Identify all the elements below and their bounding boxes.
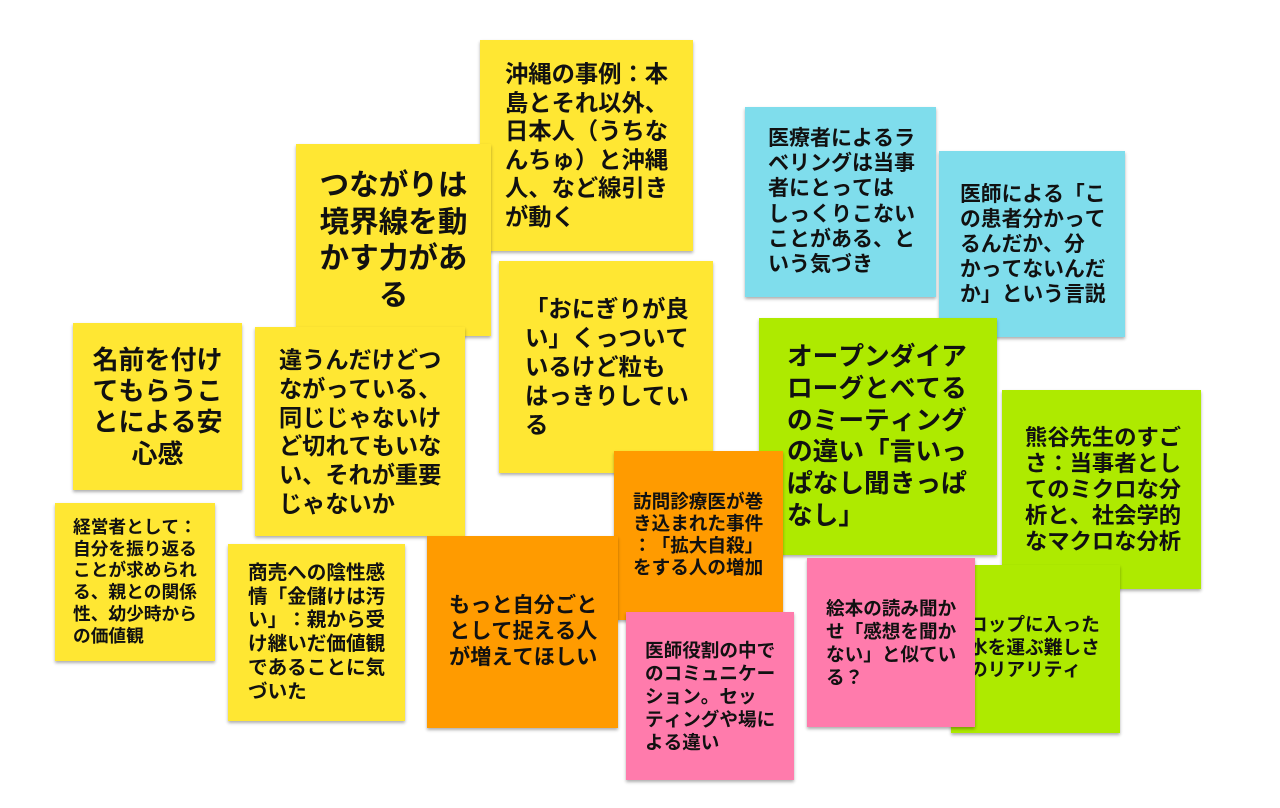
note: communication in doctor role: 医師役割の中で xyxy=(645,640,775,661)
note: as a manager: 性、幼少時から xyxy=(73,604,197,624)
note: Okinawa case: 日本人（うちな xyxy=(505,118,668,144)
note: relief of being named: 心感 xyxy=(131,439,184,469)
note: as a manager: ことが求められ xyxy=(73,560,197,580)
note: doctor discourse: るんだか、分 xyxy=(960,233,1085,256)
note: home-visit doctor incident: 訪問診療医が巻 xyxy=(633,491,763,512)
note: Okinawa case: が動く xyxy=(505,204,575,230)
note: home-visit doctor incident xyxy=(614,451,783,620)
note: Dr. Kumagaya: 析と、社会学的 xyxy=(1025,503,1181,528)
note: relief of being named: てもらうこ xyxy=(92,376,222,406)
note: as a manager: 経営者として： xyxy=(73,517,197,537)
note: as a manager: の価値観 xyxy=(73,626,144,646)
note: open dialogue vs Bethel meeting: ぱなし聞きっぱ xyxy=(787,470,967,498)
note: labeling by medical staff: いう気づき xyxy=(768,253,873,276)
note: more personal ownership: が増えてほしい xyxy=(449,646,597,669)
note: onigiri: はっきりしてい xyxy=(525,383,689,409)
note: more personal ownership xyxy=(427,536,618,728)
note: negative feelings about business: け継いだ価値観 xyxy=(248,633,385,655)
note: Okinawa case: 沖縄の事例：本 xyxy=(505,61,668,87)
note: negative feelings about business: づいた xyxy=(248,681,307,703)
note: communication in doctor role: よる違い xyxy=(645,732,719,753)
note: relief of being named: とによる安 xyxy=(92,407,222,437)
note: carrying a cup of water: のリアリティ xyxy=(969,659,1081,680)
note: home-visit doctor incident: をする人の増加 xyxy=(633,557,763,578)
note: as a manager xyxy=(55,503,215,661)
note: as a manager: る、親との関係 xyxy=(73,582,197,602)
note: labeling by medical staff: 者にとっては xyxy=(768,177,894,200)
note: onigiri: 「おにぎりが良 xyxy=(525,296,689,322)
note: doctor discourse: の患者分かって xyxy=(960,208,1106,231)
note: onigiri: る xyxy=(525,412,548,438)
note: Dr. Kumagaya xyxy=(1002,390,1201,589)
note: Dr. Kumagaya: なマクロな分析 xyxy=(1025,529,1181,554)
note: open dialogue vs Bethel meeting: なし」 xyxy=(787,502,864,530)
note: carrying a cup of water xyxy=(951,565,1120,733)
note: labeling by medical staff xyxy=(745,107,936,297)
note: as a manager: 自分を振り返る xyxy=(73,539,197,559)
note: carrying a cup of water: コップに入った xyxy=(969,614,1100,635)
note: connections move boundaries: つながりは xyxy=(320,169,467,202)
note: connections move boundaries: る xyxy=(379,278,408,312)
note: labeling by medical staff: ベリングは当事 xyxy=(768,152,915,175)
note: onigiri xyxy=(499,261,713,473)
note: negative feelings about business: 情「金儲けは汚 xyxy=(248,586,385,608)
note: picture book reading: せ「感想を聞か xyxy=(826,621,956,642)
note: Okinawa case: 人、など線引き xyxy=(505,175,668,201)
note: connections move boundaries xyxy=(296,144,491,336)
note: different but connected xyxy=(255,327,465,536)
note: Dr. Kumagaya: さ：当事者とし xyxy=(1025,451,1181,476)
note: connections move boundaries: かす力があ xyxy=(320,242,467,275)
note: different but connected: じゃないか xyxy=(279,491,395,517)
note: home-visit doctor incident: き込まれた事件 xyxy=(633,513,763,534)
note: communication in doctor role: ティングや場に xyxy=(645,709,775,730)
note: more personal ownership: もっと自分ごと xyxy=(449,594,597,617)
note: doctor discourse: か」という言説 xyxy=(960,283,1106,306)
note: different but connected: ど切れてもいな xyxy=(279,433,441,459)
note: different but connected: 違うんだけどつ xyxy=(279,347,441,373)
note: different but connected: 同じじゃないけ xyxy=(279,405,441,431)
note: Okinawa case: 島とそれ以外、 xyxy=(505,90,668,116)
note: open dialogue vs Bethel meeting: の違い「言いっ xyxy=(787,438,967,466)
note: home-visit doctor incident: ：「拡大自殺」 xyxy=(633,535,763,556)
note: open dialogue vs Bethel meeting xyxy=(759,318,997,555)
note: open dialogue vs Bethel meeting: のミーティング xyxy=(787,407,967,435)
note: Dr. Kumagaya: てのミクロな分 xyxy=(1025,477,1181,502)
note: doctor discourse: 医師による「こ xyxy=(960,183,1106,206)
note: labeling by medical staff: しっくりこない xyxy=(768,203,915,226)
note: Okinawa case xyxy=(480,40,693,251)
note: open dialogue vs Bethel meeting: オープンダイア xyxy=(787,343,967,371)
note: communication in doctor role xyxy=(626,612,794,780)
note: doctor discourse xyxy=(939,151,1125,337)
note: picture book reading: る？ xyxy=(826,667,863,688)
note: labeling by medical staff: ことがある、と xyxy=(768,228,915,251)
note: Dr. Kumagaya: 熊谷先生のすご xyxy=(1025,425,1181,450)
note: relief of being named: 名前を付け xyxy=(92,345,222,375)
note: more personal ownership: として捉える人 xyxy=(449,620,597,643)
note: connections move boundaries: 境界線を動 xyxy=(320,206,467,238)
note: relief of being named xyxy=(73,323,242,490)
note: negative feelings about business: い」：親から受 xyxy=(248,609,385,631)
note: picture book reading: ない」と似てい xyxy=(826,644,956,665)
note: open dialogue vs Bethel meeting: ローグとべてる xyxy=(787,375,967,403)
note: negative feelings about business: 商売への陰性感 xyxy=(248,562,385,584)
note: picture book reading: 絵本の読み聞か xyxy=(826,598,956,619)
note: labeling by medical staff: 医療者によるラ xyxy=(768,127,915,150)
note: carrying a cup of water: 水を運ぶ難しさ xyxy=(969,637,1100,658)
note: onigiri: い」くっついて xyxy=(525,325,689,351)
note: different but connected: ながっている、 xyxy=(279,376,441,402)
note: negative feelings about business: であることに気 xyxy=(248,657,385,679)
note: communication in doctor role: ション。セッ xyxy=(645,686,757,707)
note: doctor discourse: かってないんだ xyxy=(960,258,1106,281)
note: different but connected: い、それが重要 xyxy=(279,462,441,488)
note: negative feelings about business xyxy=(228,544,405,721)
note: onigiri: いるけど粒も xyxy=(525,354,665,380)
note: communication in doctor role: のコミュニケー xyxy=(645,663,775,684)
note: Okinawa case: んちゅ）と沖縄 xyxy=(505,146,668,172)
note: picture book reading xyxy=(807,558,975,727)
